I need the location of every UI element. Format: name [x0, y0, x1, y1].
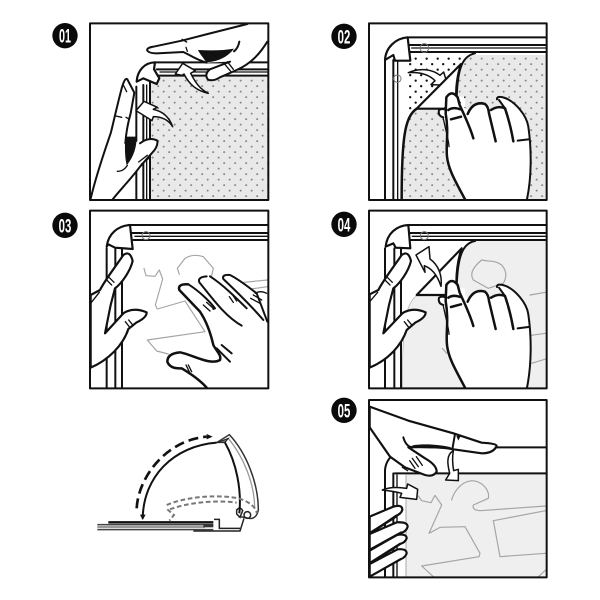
panel border — [369, 400, 547, 577]
arc from cover to base — [143, 443, 217, 519]
frame rails — [385, 37, 546, 199]
left hand — [91, 79, 157, 199]
badge: 03: 03 — [59, 216, 71, 237]
badge: 02: 02 — [338, 27, 350, 48]
badge: 04 — [331, 212, 357, 237]
frame rails — [385, 447, 546, 577]
hinged cover open — [217, 435, 258, 519]
frame rails — [385, 225, 546, 388]
dotted backing sheet, lower part — [402, 109, 465, 199]
badge: 01 — [52, 23, 78, 48]
left hand — [91, 253, 147, 368]
corner piece — [107, 225, 133, 249]
badge: 05: 05 — [338, 401, 350, 422]
panel: step 04 — [331, 211, 547, 388]
dashed motion arc — [137, 437, 207, 508]
badge: 05 — [331, 398, 357, 423]
corner piece — [385, 37, 410, 61]
panel: step 05 — [331, 398, 547, 577]
arrow: top snap open — [175, 63, 208, 93]
panel border — [369, 23, 547, 200]
right hand — [439, 281, 531, 388]
poster — [406, 474, 546, 577]
arrow: top rail closing — [446, 451, 458, 481]
poster figure outline — [418, 481, 546, 577]
badge: 02 — [331, 24, 357, 49]
panel border — [369, 211, 547, 388]
panel border — [90, 211, 268, 388]
cover inner line — [228, 438, 255, 508]
panel border — [90, 23, 268, 200]
right hand — [167, 275, 267, 388]
top hand — [147, 24, 267, 80]
arrow: curl — [408, 70, 448, 85]
corner piece — [386, 225, 410, 248]
left hand — [370, 253, 426, 368]
badge: 04: 04 — [338, 215, 350, 236]
poster and base profile — [97, 518, 244, 531]
closed cover ghost — [167, 496, 257, 521]
arrow: up to corner — [416, 247, 441, 286]
aluminium frame — [136, 62, 267, 199]
arrow: side rail closing — [382, 484, 418, 499]
poster figure outline — [144, 255, 267, 354]
top hand — [370, 407, 497, 476]
cover tip — [217, 438, 228, 443]
arrow: side snap open — [136, 101, 173, 127]
poster sheet, upper — [457, 241, 546, 388]
badge: 01: 01 — [59, 27, 71, 48]
panel: step 01 — [52, 23, 268, 200]
exposed dotted board — [407, 57, 470, 110]
frame rails — [107, 225, 267, 388]
panel: step 03 — [52, 211, 268, 388]
left hand fingers — [370, 506, 408, 577]
dotted backing board — [151, 77, 268, 199]
poster figure outline — [442, 260, 546, 363]
badge: 03 — [52, 213, 78, 238]
hand pressing sheet — [439, 93, 531, 199]
corner piece opened — [137, 62, 159, 84]
arrowhead: dashed arc — [207, 434, 213, 439]
diagram: frame cross-section — [97, 434, 258, 531]
hinge detail — [237, 508, 251, 518]
arrowhead: arc end — [140, 515, 146, 520]
arc inside cover — [225, 443, 240, 513]
folded poster corner — [417, 248, 462, 295]
poster sheet, lower — [402, 296, 465, 388]
panel: step 02 — [331, 23, 547, 200]
dotted backing sheet, upper part — [457, 55, 546, 199]
folded corner flap — [417, 64, 461, 109]
